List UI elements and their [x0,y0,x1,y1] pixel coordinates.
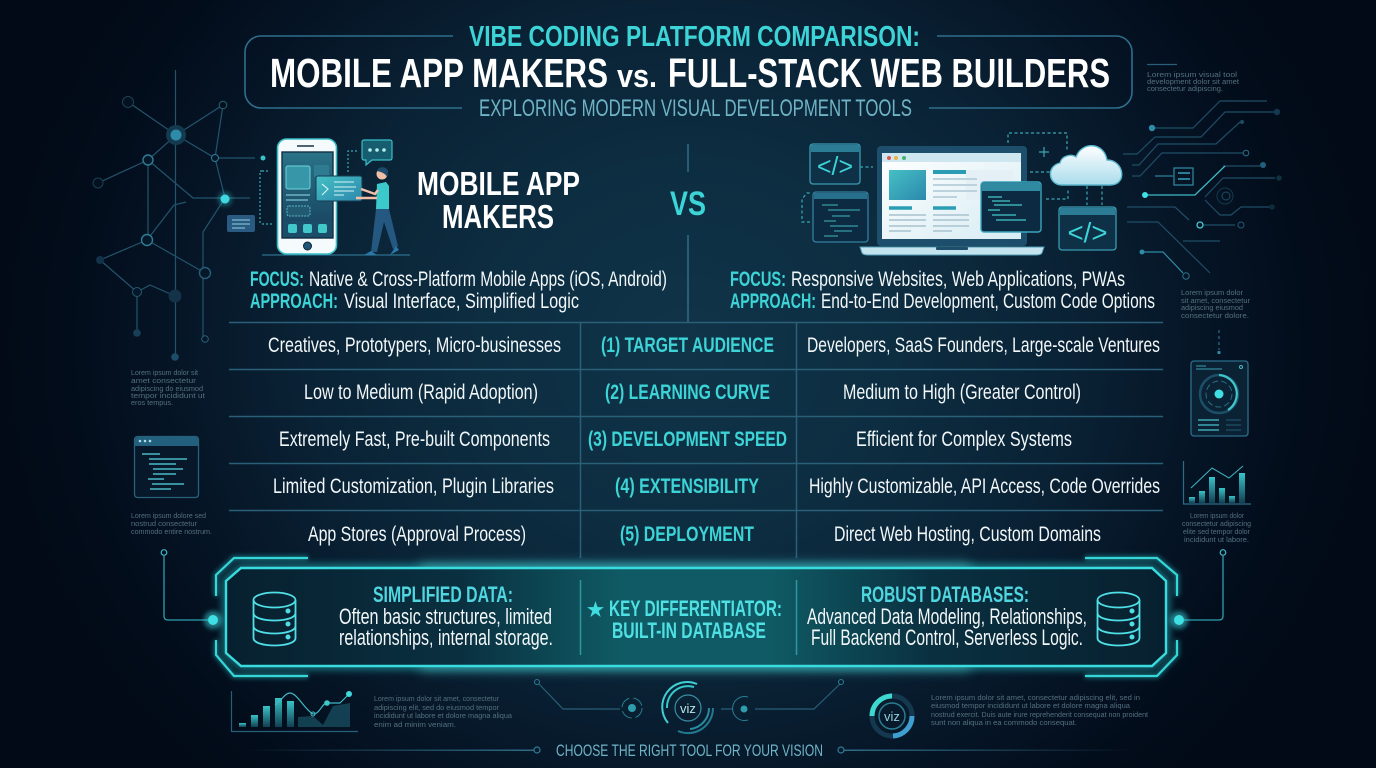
row: learning curve: Low to Medium (Rapid Adoption) [304,381,538,404]
left note one: eros tempus. [131,400,173,407]
phone [278,139,336,254]
row: deployment: (5) DEPLOYMENT [620,523,754,546]
code window lower left [813,192,868,242]
left note one: tempor incididunt ut [131,393,205,400]
bottom right note: sunt non aliqua in ea commodo consequat. [931,720,1077,727]
row: target audience: Developers, SaaS Founders, Large-scale Ventures [807,334,1160,357]
viz label: viz [680,701,696,716]
row: learning curve: Medium to High (Greater Control) [843,381,1081,404]
viz ring right: viz [884,709,900,724]
code window overlay [981,182,1041,232]
left section heading: MOBILE APP [417,165,580,202]
robust databases text: Full Backend Control, Serverless Logic. [811,625,1083,650]
main heading [270,50,1110,96]
top right note: consectetur adipiscing. [1147,86,1223,93]
panel dividers [580,580,796,655]
row: learning curve [304,381,1081,404]
top right note [1147,64,1239,93]
left section heading [417,165,580,235]
right note one: consectetur dolore. [1181,313,1249,320]
simplified data text [339,582,553,650]
plus sign [1039,147,1049,157]
note card [227,215,255,232]
right note two: incididunt ut labore. [1184,537,1249,544]
main heading: vs. [617,58,657,94]
network decoration left [93,70,255,361]
focus and approach left: Native & Cross-Platform Mobile Apps (iOS, Android) [309,268,667,291]
key differentiator text [587,596,782,643]
focus and approach left: Visual Interface, Simplified Logic [344,290,579,313]
row: extensibility: Limited Customization, Plugin Libraries [273,475,554,498]
comparison table [229,322,1163,558]
bottom right note: Lorem ipsum dolor sit amet, consectetur adipiscing elit, sed in [931,695,1140,702]
row: learning curve: (2) LEARNING CURVE [605,381,770,404]
row: development speed [279,428,1072,451]
panel glow [226,568,1166,666]
right note two [1182,513,1251,544]
top right note: development dolor sit amet [1147,79,1239,86]
key differentiator text: BUILT-IN DATABASE [612,618,766,643]
left note one: adipiscing do eiusmod [131,386,203,393]
robust databases text [807,582,1087,650]
row: extensibility [273,475,1160,498]
cloud [1050,146,1122,185]
right note one: Lorem ipsum dolor [1181,290,1244,297]
viz ring right [872,696,912,736]
title block [245,21,1132,122]
main heading: FULL-STACK WEB BUILDERS [668,50,1110,96]
left note two: Lorem ipsum dolore sed [131,513,206,520]
right connector [1170,550,1226,629]
bottom left note: Lorem ipsum dolor sit amet, consectetur [374,696,500,703]
ground line [262,254,410,256]
focus and approach right: APPROACH: [730,290,816,313]
bottom left note: adipiscing elit, sed do eiusmod tempor [374,705,500,712]
row: target audience: Creatives, Prototypers, Micro-businesses [268,334,561,357]
key differentiator text: KEY DIFFERENTIATOR: [609,596,782,621]
key differentiator text: ★ [587,600,604,621]
dashed connectors [802,133,1102,222]
main heading: MOBILE APP MAKERS [270,50,608,96]
bottom left note: enim ad minim veniam. [374,722,456,729]
row: development speed: Efficient for Complex Systems [856,428,1072,451]
row: extensibility: Highly Customizable, API Access, Code Overrides [809,475,1160,498]
connector lines [260,151,358,224]
row: extensibility: (4) EXTENSIBILITY [615,475,759,498]
center line glow [420,568,970,666]
code window lower right [1059,207,1116,250]
row: development speed: (3) DEVELOPMENT SPEED [588,428,787,451]
focus and approach right: End-to-End Development, Custom Code Options [821,290,1155,313]
right note two: consectetur adipiscing [1182,521,1251,528]
panel body [226,568,1166,666]
icon: database right [1098,592,1140,646]
left section heading: MAKERS [442,198,554,235]
bottom right note: eiusmod tempor incididunt ut labore et dolore magna aliqua [931,703,1130,710]
top right note: Lorem ipsum visual tool [1147,72,1238,79]
icon: database left [254,592,296,646]
focus and approach right [730,268,1155,313]
left note two [131,513,212,536]
row: deployment [308,523,1101,546]
simplified data text: SIMPLIFIED DATA: [373,582,513,607]
floating card [316,176,362,201]
focus and approach right: Responsive Websites, Web Applications, PWAs [791,268,1125,291]
focus and approach left: FOCUS: [250,268,304,291]
row: deployment: Direct Web Hosting, Custom Domains [834,523,1101,546]
row: target audience [268,334,1160,357]
bottom right note [931,695,1148,727]
row: deployment: App Stores (Approval Process) [308,523,526,546]
title frame [245,36,1132,108]
code window top left: </> [817,151,853,181]
focus and approach left: APPROACH: [250,290,338,313]
simplified data text: Often basic structures, limited [339,604,552,629]
robust databases text: Advanced Data Modeling, Relationships, [807,604,1087,629]
left note two: commodo entire nostrum. [131,529,212,536]
bar chart right [1184,461,1251,504]
bottom left note [374,696,512,729]
outer brackets [216,558,1177,676]
mobile illustration [227,139,410,255]
left note one: Lorem ipsum dolor sit [131,370,198,377]
left connector [161,550,222,629]
focus and approach right: FOCUS: [730,268,786,291]
rings [662,682,713,733]
bottom left note: incididunt ut labore et dolore magna aliqua [374,713,512,720]
right note two: elite sed tempor dolor [1183,529,1251,536]
code window lower right: </> [1068,217,1108,248]
left note one [131,370,205,407]
row: development speed: Extremely Fast, Pre-built Components [279,428,550,451]
code window top left [810,144,860,184]
robust databases text: ROBUST DATABASES: [861,582,1029,607]
eyebrow heading: VIBE CODING PLATFORM COMPARISON: [469,21,920,53]
left note two: nostrud consectetur [131,521,198,528]
focus and approach left [250,268,667,313]
right note one: sit amet, consectetur [1181,298,1251,305]
person [356,167,399,255]
web illustration [802,133,1122,255]
left note one: amet consectetur [131,378,197,385]
key differentiator panel [161,550,1226,676]
footer tagline [240,741,1140,760]
footer tagline: CHOOSE THE RIGHT TOOL FOR YOUR VISION [556,741,823,760]
bottom left chart [232,691,358,732]
code window icon left [134,436,198,498]
vs divider: VS [670,185,706,223]
right note one [1181,290,1251,320]
row: target audience: (1) TARGET AUDIENCE [601,334,774,357]
laptop [860,146,1044,255]
right note two: Lorem ipsum dolor [1190,513,1245,520]
circuit decoration right [1123,101,1282,279]
right note one: adipiscing eiusmod [1181,305,1243,312]
connector right [721,680,844,720]
center viz emblem [534,680,844,733]
chat bubble [362,140,392,165]
connector left [534,680,642,718]
tablet icon [1191,330,1248,436]
bottom right note: nostrud exercit. Duis aute irure reprehenderit consequat non proident [931,712,1148,719]
subtitle: EXPLORING MODERN VISUAL DEVELOPMENT TOOLS [479,95,912,122]
simplified data text: relationships, internal storage. [339,625,553,650]
